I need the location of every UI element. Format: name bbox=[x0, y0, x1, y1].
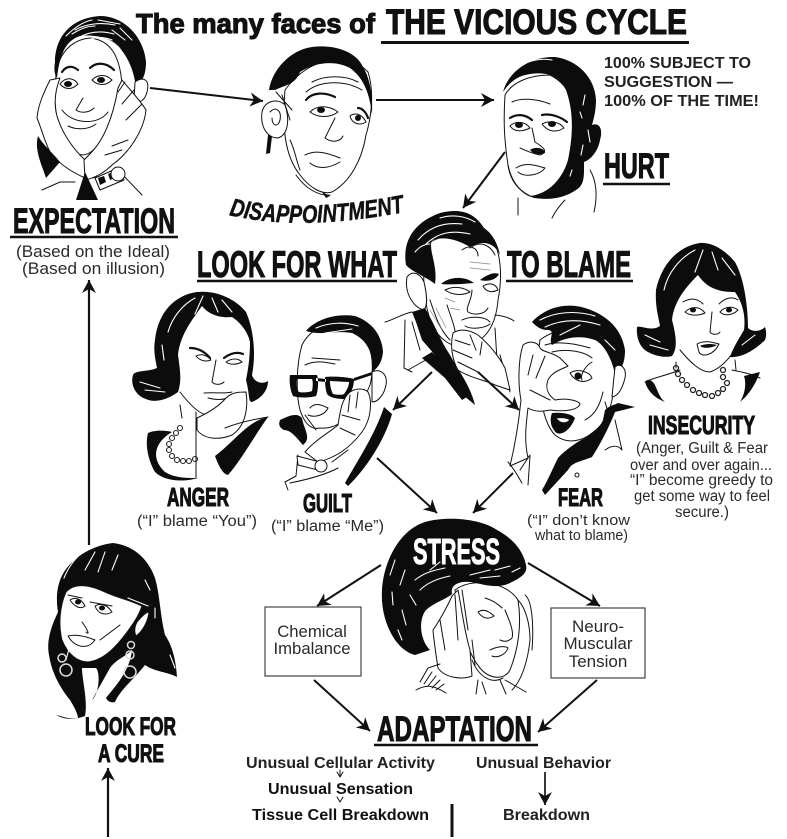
text: 100% subject to suggestion: 100% OF THE TIME! bbox=[604, 93, 759, 110]
box: neuro-muscular tension: Tension bbox=[569, 652, 627, 671]
label: disappointment: DISAPPOINTMENT bbox=[229, 194, 404, 224]
box: neuro-muscular tension bbox=[551, 608, 645, 678]
arrow: chemical imbalance to adaptation bbox=[314, 680, 370, 731]
title: The many faces of bbox=[136, 8, 376, 39]
label: insecurity bbox=[630, 410, 773, 521]
text: breakdown: Breakdown bbox=[503, 807, 590, 824]
box: neuro-muscular tension: Muscular bbox=[564, 634, 633, 653]
face: stress bbox=[382, 519, 533, 694]
face: guilt bbox=[279, 315, 392, 490]
heading: hurt: HURT bbox=[604, 147, 669, 186]
label: guilt: GUILT bbox=[303, 488, 352, 518]
face: expectation bbox=[37, 16, 148, 200]
label: look for a cure: A CURE bbox=[98, 740, 164, 768]
text: based on the ideal: (Based on illusion) bbox=[22, 260, 165, 278]
heading: look for what to blame: LOOK FOR WHAT bbox=[197, 244, 397, 285]
arrow: fear to stress bbox=[473, 473, 513, 513]
arrow: hurt to look for what to blame bbox=[463, 152, 505, 208]
arrow: unusual behavior to breakdown bbox=[544, 772, 546, 805]
arrow: breakdown up to look for a cure bbox=[107, 768, 109, 837]
label: look for a cure: LOOK FOR bbox=[85, 713, 176, 741]
label: fear bbox=[527, 484, 630, 544]
text: unusual cellular activity chain: Tissue Cell Breakdown bbox=[252, 807, 429, 824]
title bbox=[136, 3, 689, 42]
face: look for what to blame bbox=[385, 211, 514, 405]
label: fear: (“I” don’t know bbox=[527, 512, 630, 529]
label: insecurity: (Anger, Guilt & Fear bbox=[636, 440, 768, 457]
arrow: blame to guilt bbox=[393, 372, 432, 410]
label: insecurity: secure.) bbox=[675, 504, 729, 521]
box: neuro-muscular tension: Neuro- bbox=[572, 617, 624, 636]
title: THE VICIOUS CYCLE bbox=[386, 3, 687, 42]
face: hurt bbox=[503, 57, 601, 218]
box: chemical imbalance: Imbalance bbox=[274, 639, 350, 658]
label: anger: (“I” blame “You”) bbox=[137, 513, 257, 530]
arrow: disappointment to hurt bbox=[376, 99, 494, 101]
label: guilt: (“I” blame “Me”) bbox=[271, 518, 384, 535]
text: unusual cellular activity chain: Unusual Sensation bbox=[268, 781, 413, 798]
label: look for a cure bbox=[85, 713, 176, 768]
text: unusual cellular activity chain: Unusual Cellular Activity bbox=[246, 755, 435, 772]
arrow: expectation to disappointment bbox=[150, 88, 263, 101]
arrow: neuro-muscular tension to adaptation bbox=[538, 680, 597, 732]
text: unusual behavior: Unusual Behavior bbox=[476, 755, 611, 772]
label: anger bbox=[137, 482, 257, 530]
label: fear: what to blame) bbox=[534, 527, 628, 544]
arrow: stress to chemical imbalance bbox=[317, 565, 381, 606]
text: 100% subject to suggestion: SUGGESTION — bbox=[604, 74, 733, 91]
text: 100% subject to suggestion bbox=[604, 55, 759, 110]
text: based on the ideal bbox=[16, 243, 170, 278]
label: stress: STRESS bbox=[413, 531, 500, 572]
heading: adaptation: ADAPTATION bbox=[377, 710, 532, 749]
box: chemical imbalance bbox=[265, 607, 361, 676]
arrow: stress to neuro-muscular tension bbox=[528, 563, 600, 606]
label: anger: ANGER bbox=[167, 482, 229, 512]
arrow: guilt to stress bbox=[377, 458, 437, 513]
text: unusual cellular activity chain bbox=[246, 755, 435, 824]
label: insecurity: over and over again... bbox=[630, 457, 772, 474]
text: based on the ideal: (Based on the Ideal) bbox=[16, 243, 170, 261]
face: insecurity bbox=[637, 243, 766, 402]
face: anger bbox=[132, 292, 268, 480]
face: disappointment bbox=[262, 46, 372, 198]
heading: look for what to blame: TO BLAME bbox=[507, 244, 631, 285]
heading: expectation: EXPECTATION bbox=[13, 202, 175, 241]
label: guilt bbox=[271, 488, 384, 535]
box: chemical imbalance: Chemical bbox=[277, 622, 347, 641]
arrow: blame to fear bbox=[478, 372, 519, 410]
text: 100% subject to suggestion: 100% SUBJECT TO bbox=[604, 55, 751, 72]
label: insecurity: get some way to feel bbox=[634, 488, 770, 505]
label: fear: FEAR bbox=[558, 484, 603, 512]
label: insecurity: “I” become greedy to bbox=[630, 472, 773, 489]
face: fear bbox=[508, 306, 635, 495]
face: look for a cure bbox=[48, 543, 177, 719]
heading: hurt bbox=[603, 147, 670, 186]
arrow: look for a cure up to expectation bbox=[88, 280, 90, 545]
